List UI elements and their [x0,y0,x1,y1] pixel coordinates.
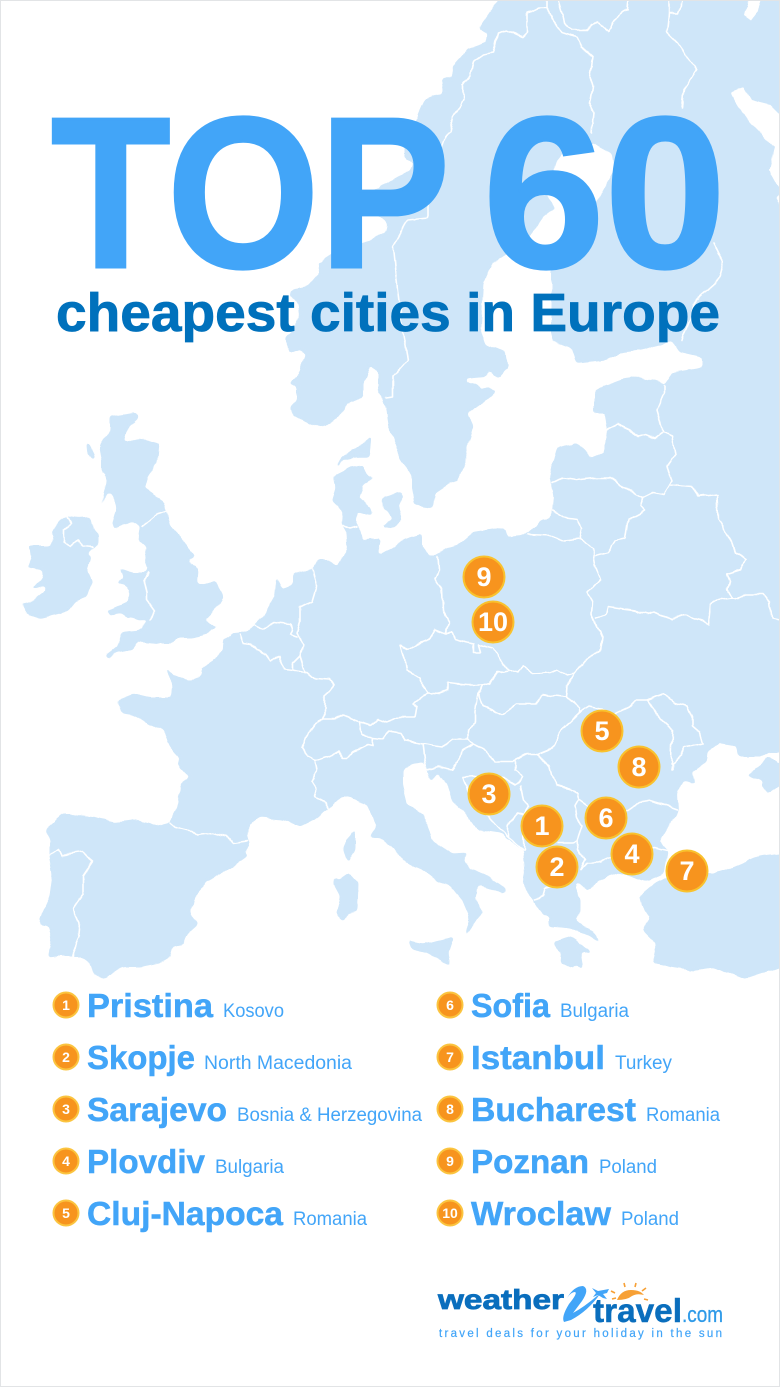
entry 8: Bucharest [471,1091,636,1128]
subtitle: cheapest cities in Europe [56,283,720,343]
marker 5: Cluj-Napoca [582,710,622,752]
title: TOP 60: 60 [483,72,726,313]
title: TOP 60: TOP [51,72,450,313]
marker 6: Sofia [586,798,626,838]
logo wordmark: .com: .com [682,1302,723,1327]
entry 7 [438,1039,672,1076]
marker 4: Plovdiv [612,834,652,874]
entry 6: Sofia [471,987,551,1024]
land: Great Britain [100,413,223,657]
marker 8: Bucharest: 8 [631,752,647,782]
entry 3: 3 [62,1101,70,1117]
marker 6: Sofia: 6 [598,803,614,833]
land: Vendsyssel, Denmark [337,439,370,467]
entry 9: Poland [599,1157,657,1178]
entry 1 [54,987,284,1024]
marker 9: Poznan [464,556,504,598]
marker 5: Cluj-Napoca: 5 [594,716,610,746]
logo wordmark: travel: travel [593,1292,682,1329]
marker 10: Wroclaw: 10 [478,607,508,637]
entry 4 [54,1143,284,1180]
land masses [22,0,780,978]
entry 2: 2 [62,1049,70,1065]
entry 1: Pristina [87,987,214,1024]
land: Ireland [22,517,98,618]
entry 8: Romania [646,1105,720,1126]
entry 10: Wroclaw [471,1195,611,1232]
marker 7: Istanbul [666,850,708,892]
entry 6: Bulgaria [560,1001,629,1022]
map of Europe [22,0,780,978]
entry 2: North Macedonia [204,1053,352,1074]
entry 4: Plovdiv [87,1143,206,1180]
entry 5 [54,1195,367,1232]
entry 6 [438,987,629,1024]
entry 1: 1 [62,997,70,1013]
country borders [50,0,780,956]
land: mainland Europe and Scandinavia [40,0,780,978]
ranking list: left column [54,987,422,1232]
land: Sicily [408,937,453,965]
map markers [464,556,708,892]
entry 5: Cluj-Napoca [87,1195,284,1232]
entry 7: 7 [446,1049,454,1065]
land: Corsica [344,831,355,861]
marker 8: Bucharest [618,746,660,788]
logo: weather2travel.com [437,1283,723,1340]
entry 6: 6 [446,997,454,1013]
entry 9: Poznan [471,1143,589,1180]
entry 5: Romania [293,1209,367,1230]
marker 2: Skopje: 2 [549,852,565,882]
marker 7: Istanbul: 7 [679,856,695,886]
logo wordmark: weather: weather [437,1284,564,1315]
entry 4: 4 [62,1153,70,1169]
entry 8 [438,1091,720,1128]
entry 5: 5 [62,1205,70,1221]
entry 10: Poland [621,1209,679,1230]
entry 8: 8 [446,1101,454,1117]
land: Crimea [747,757,780,794]
entry 10 [438,1195,679,1232]
lake: White Sea [731,88,780,205]
entry 2: Skopje [87,1039,195,1076]
logo tagline: travel deals for your holiday in the sun [439,1328,722,1340]
land: Zealand, Denmark [382,491,403,528]
marker 2: Skopje [536,846,578,888]
land: Sardinia [334,874,358,920]
land: Hebrides [87,444,93,459]
ranking list: right column [438,987,720,1232]
entry 3 [54,1091,422,1128]
icon: swoosh 2 [563,1286,600,1322]
entry 3: Bosnia & Herzegovina [237,1105,422,1126]
marker 4: Plovdiv: 4 [624,839,640,869]
entry 1: Kosovo [223,1001,284,1022]
entry 2 [54,1039,352,1076]
land: Turkey [640,852,780,978]
entry 3: Sarajevo [87,1091,227,1128]
marker 9: Poznan: 9 [476,562,492,592]
title: TOP 60 [51,72,726,313]
entry 4: Bulgaria [215,1157,284,1178]
entry 9: 9 [446,1153,454,1169]
marker 3: Sarajevo: 3 [481,779,497,809]
entry 10: 10 [442,1205,458,1221]
icon: plane [592,1288,609,1299]
icon: sun [611,1283,648,1300]
entry 7: Turkey [615,1053,672,1074]
marker 3: Sarajevo [468,774,510,814]
entry 7: Istanbul [471,1039,605,1076]
marker 1: Pristina: 1 [534,811,550,841]
land: Peloponnese [553,937,592,968]
marker 10: Wroclaw [472,602,514,642]
entry 9 [438,1143,657,1180]
lake: northern inlet [744,0,761,20]
marker 1: Pristina [522,806,562,846]
